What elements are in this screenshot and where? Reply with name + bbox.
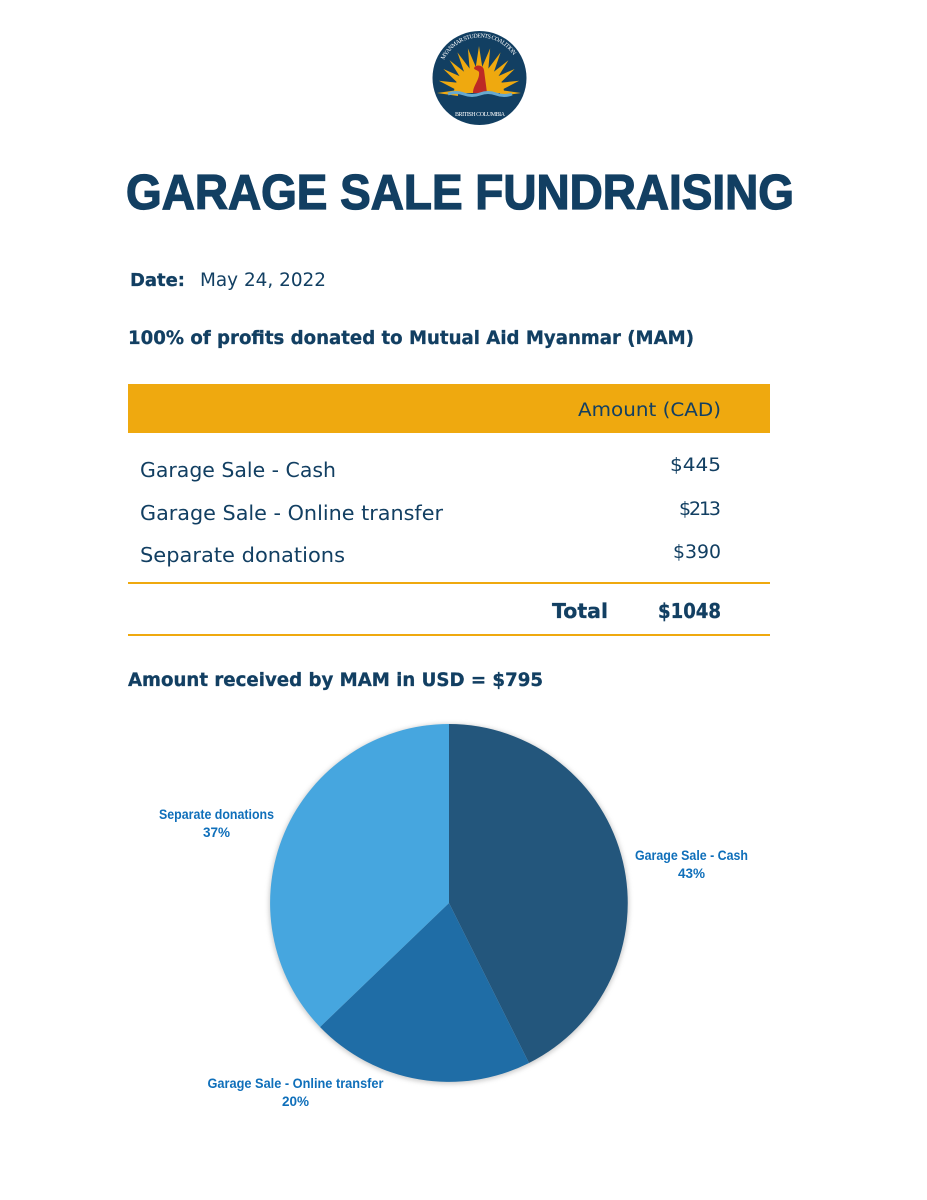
row: online transfer: Garage Sale - Online transfer bbox=[140, 501, 444, 525]
row: separate donations: $390 bbox=[673, 541, 721, 563]
icon: Myanmar Students Coalition logo bbox=[432, 31, 526, 125]
label: online transfer: Garage Sale - Online transfer bbox=[208, 1076, 384, 1091]
label: separate donations bbox=[159, 807, 274, 840]
label: online transfer: 20% bbox=[282, 1094, 309, 1109]
label: separate donations: Separate donations bbox=[159, 807, 274, 822]
row: separate donations bbox=[140, 541, 721, 567]
row: total bbox=[552, 599, 721, 623]
label: separate donations: 37% bbox=[203, 825, 230, 840]
row: garage sale cash: $445 bbox=[670, 454, 721, 476]
logo water waves bbox=[448, 92, 512, 96]
row: garage sale cash: Garage Sale - Cash bbox=[140, 458, 336, 482]
slice: online transfer 20% bbox=[320, 903, 529, 1082]
row: separate donations: Separate donations bbox=[140, 543, 345, 567]
logo top lettering bbox=[444, 37, 516, 60]
table bbox=[128, 384, 770, 636]
table header bbox=[128, 384, 770, 433]
logo peacock bbox=[473, 66, 487, 93]
pie chart bbox=[159, 724, 748, 1109]
slice: garage sale cash 43% bbox=[449, 724, 628, 1063]
label: online transfer bbox=[208, 1076, 384, 1109]
date label: Date: bbox=[130, 270, 185, 291]
logo sun rays bbox=[437, 46, 521, 96]
logo bottom lettering: BRITISH COLUMBIA bbox=[455, 112, 506, 118]
title: GARAGE SALE FUNDRAISING bbox=[126, 166, 794, 220]
date value: May 24, 2022 bbox=[200, 269, 326, 291]
icon: Myanmar Students Coalition logo: MYANMAR STUDENTS COALITION bbox=[440, 34, 516, 60]
row: total: $1048 bbox=[658, 599, 721, 623]
row: online transfer: $213 bbox=[679, 498, 721, 520]
row: total: Total bbox=[552, 599, 608, 623]
row: garage sale cash bbox=[140, 454, 721, 482]
table header: Amount (CAD) bbox=[578, 400, 721, 421]
subheading: amount received: Amount received by MAM in USD = $795 bbox=[128, 669, 543, 691]
label: garage sale cash: 43% bbox=[678, 866, 705, 881]
row: online transfer bbox=[140, 498, 721, 525]
logo sun disc bbox=[454, 68, 504, 93]
subheading: profits donated: 100% of profits donated to Mutual Aid Myanmar (MAM) bbox=[128, 327, 694, 349]
slice: separate donations 37% bbox=[270, 724, 449, 1027]
label: garage sale cash: Garage Sale - Cash bbox=[635, 848, 748, 863]
label: garage sale cash bbox=[635, 848, 748, 881]
